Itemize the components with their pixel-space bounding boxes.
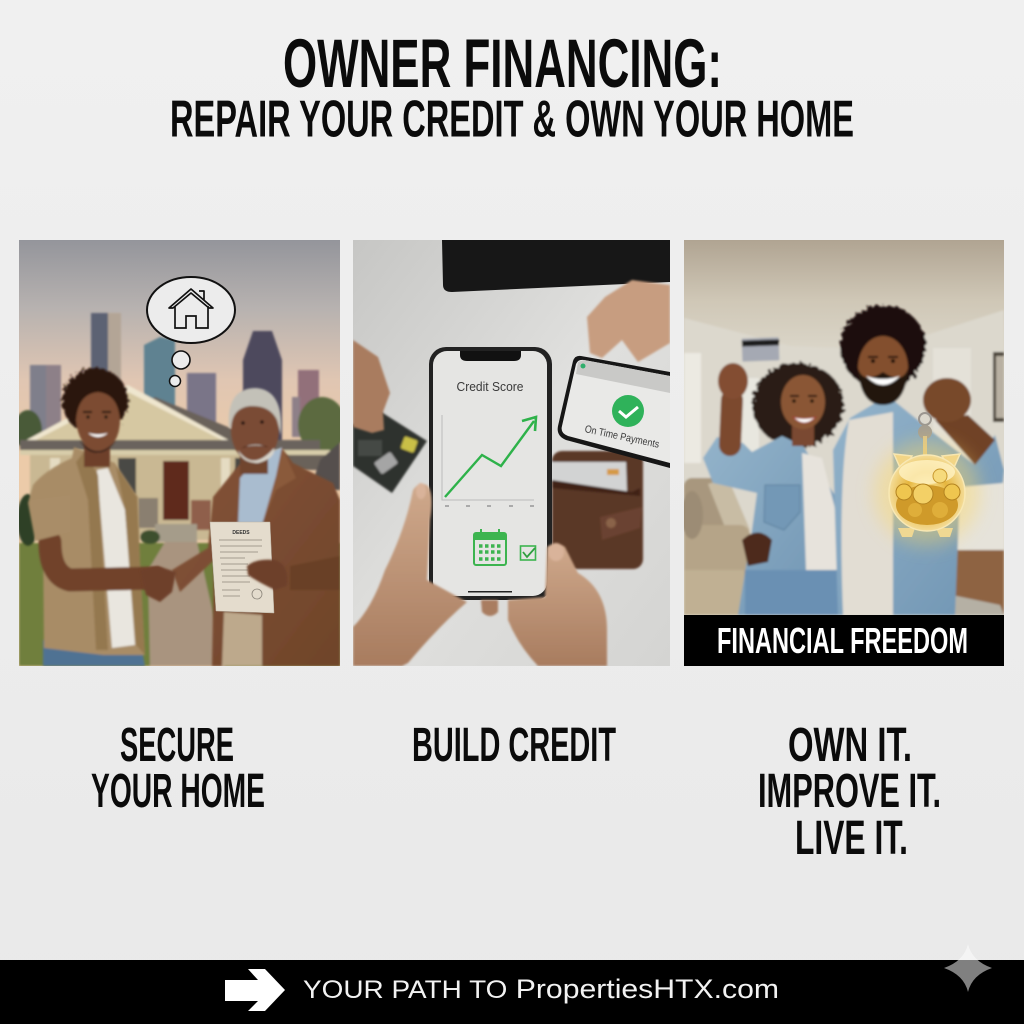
panel: financial freedom photo <box>681 240 1004 615</box>
trees <box>298 397 346 453</box>
wallet <box>552 451 643 569</box>
man on left in tan shirt <box>28 368 155 666</box>
label: own it improve it live it <box>758 719 941 865</box>
hands holding phone <box>353 483 607 666</box>
handshake <box>140 566 176 602</box>
dark tablet on table <box>442 240 670 292</box>
room details <box>684 310 1004 615</box>
icon: small check box <box>520 546 536 560</box>
icon: key <box>918 413 932 458</box>
icon: sparkle watermark <box>944 944 992 992</box>
sofa <box>681 478 750 615</box>
main phone with credit score chart <box>429 347 552 600</box>
label: own it improve it live it: LIVE IT. <box>795 812 908 865</box>
man on right in brown jacket <box>172 388 340 666</box>
left hand holding card <box>353 340 390 433</box>
thought bubble with house icon <box>147 277 235 386</box>
footer text: YOUR PATH TO PropertiesHTX.com <box>303 974 779 1004</box>
panel: secure your home photo <box>14 240 346 666</box>
label: build credit: BUILD CREDIT <box>412 719 616 772</box>
icon: calendar <box>474 529 506 565</box>
small phone showing on time payments <box>558 356 670 468</box>
credit card held up <box>742 337 779 362</box>
icon: glowing piggy bank <box>865 431 989 555</box>
hand holding contract <box>247 560 288 590</box>
black credit card left <box>353 410 427 493</box>
icon: white arrow <box>225 969 285 1011</box>
panel: build credit photo <box>353 240 670 666</box>
contract document <box>210 522 274 613</box>
title: OWNER FINANCING: <box>283 25 722 102</box>
financial freedom banner <box>684 615 1004 666</box>
label: secure your home: SECURE <box>120 719 234 772</box>
label: secure your home: YOUR HOME <box>91 765 265 818</box>
contract document: DEEDS <box>232 530 250 536</box>
house <box>20 385 340 542</box>
small phone showing on time payments: On Time Payments <box>584 423 660 451</box>
woman with credit card <box>703 363 844 615</box>
credit score line chart <box>442 415 536 506</box>
main phone with credit score chart: Credit Score <box>456 379 524 394</box>
right hand holding small phone <box>587 280 670 362</box>
footer bar <box>0 960 1024 1024</box>
skyline buildings <box>30 313 319 440</box>
man with key and piggy bank <box>742 305 1004 615</box>
lawn and path <box>19 543 340 666</box>
label: secure your home <box>91 719 265 818</box>
label: own it improve it live it: OWN IT. <box>788 719 912 772</box>
title <box>170 25 854 148</box>
